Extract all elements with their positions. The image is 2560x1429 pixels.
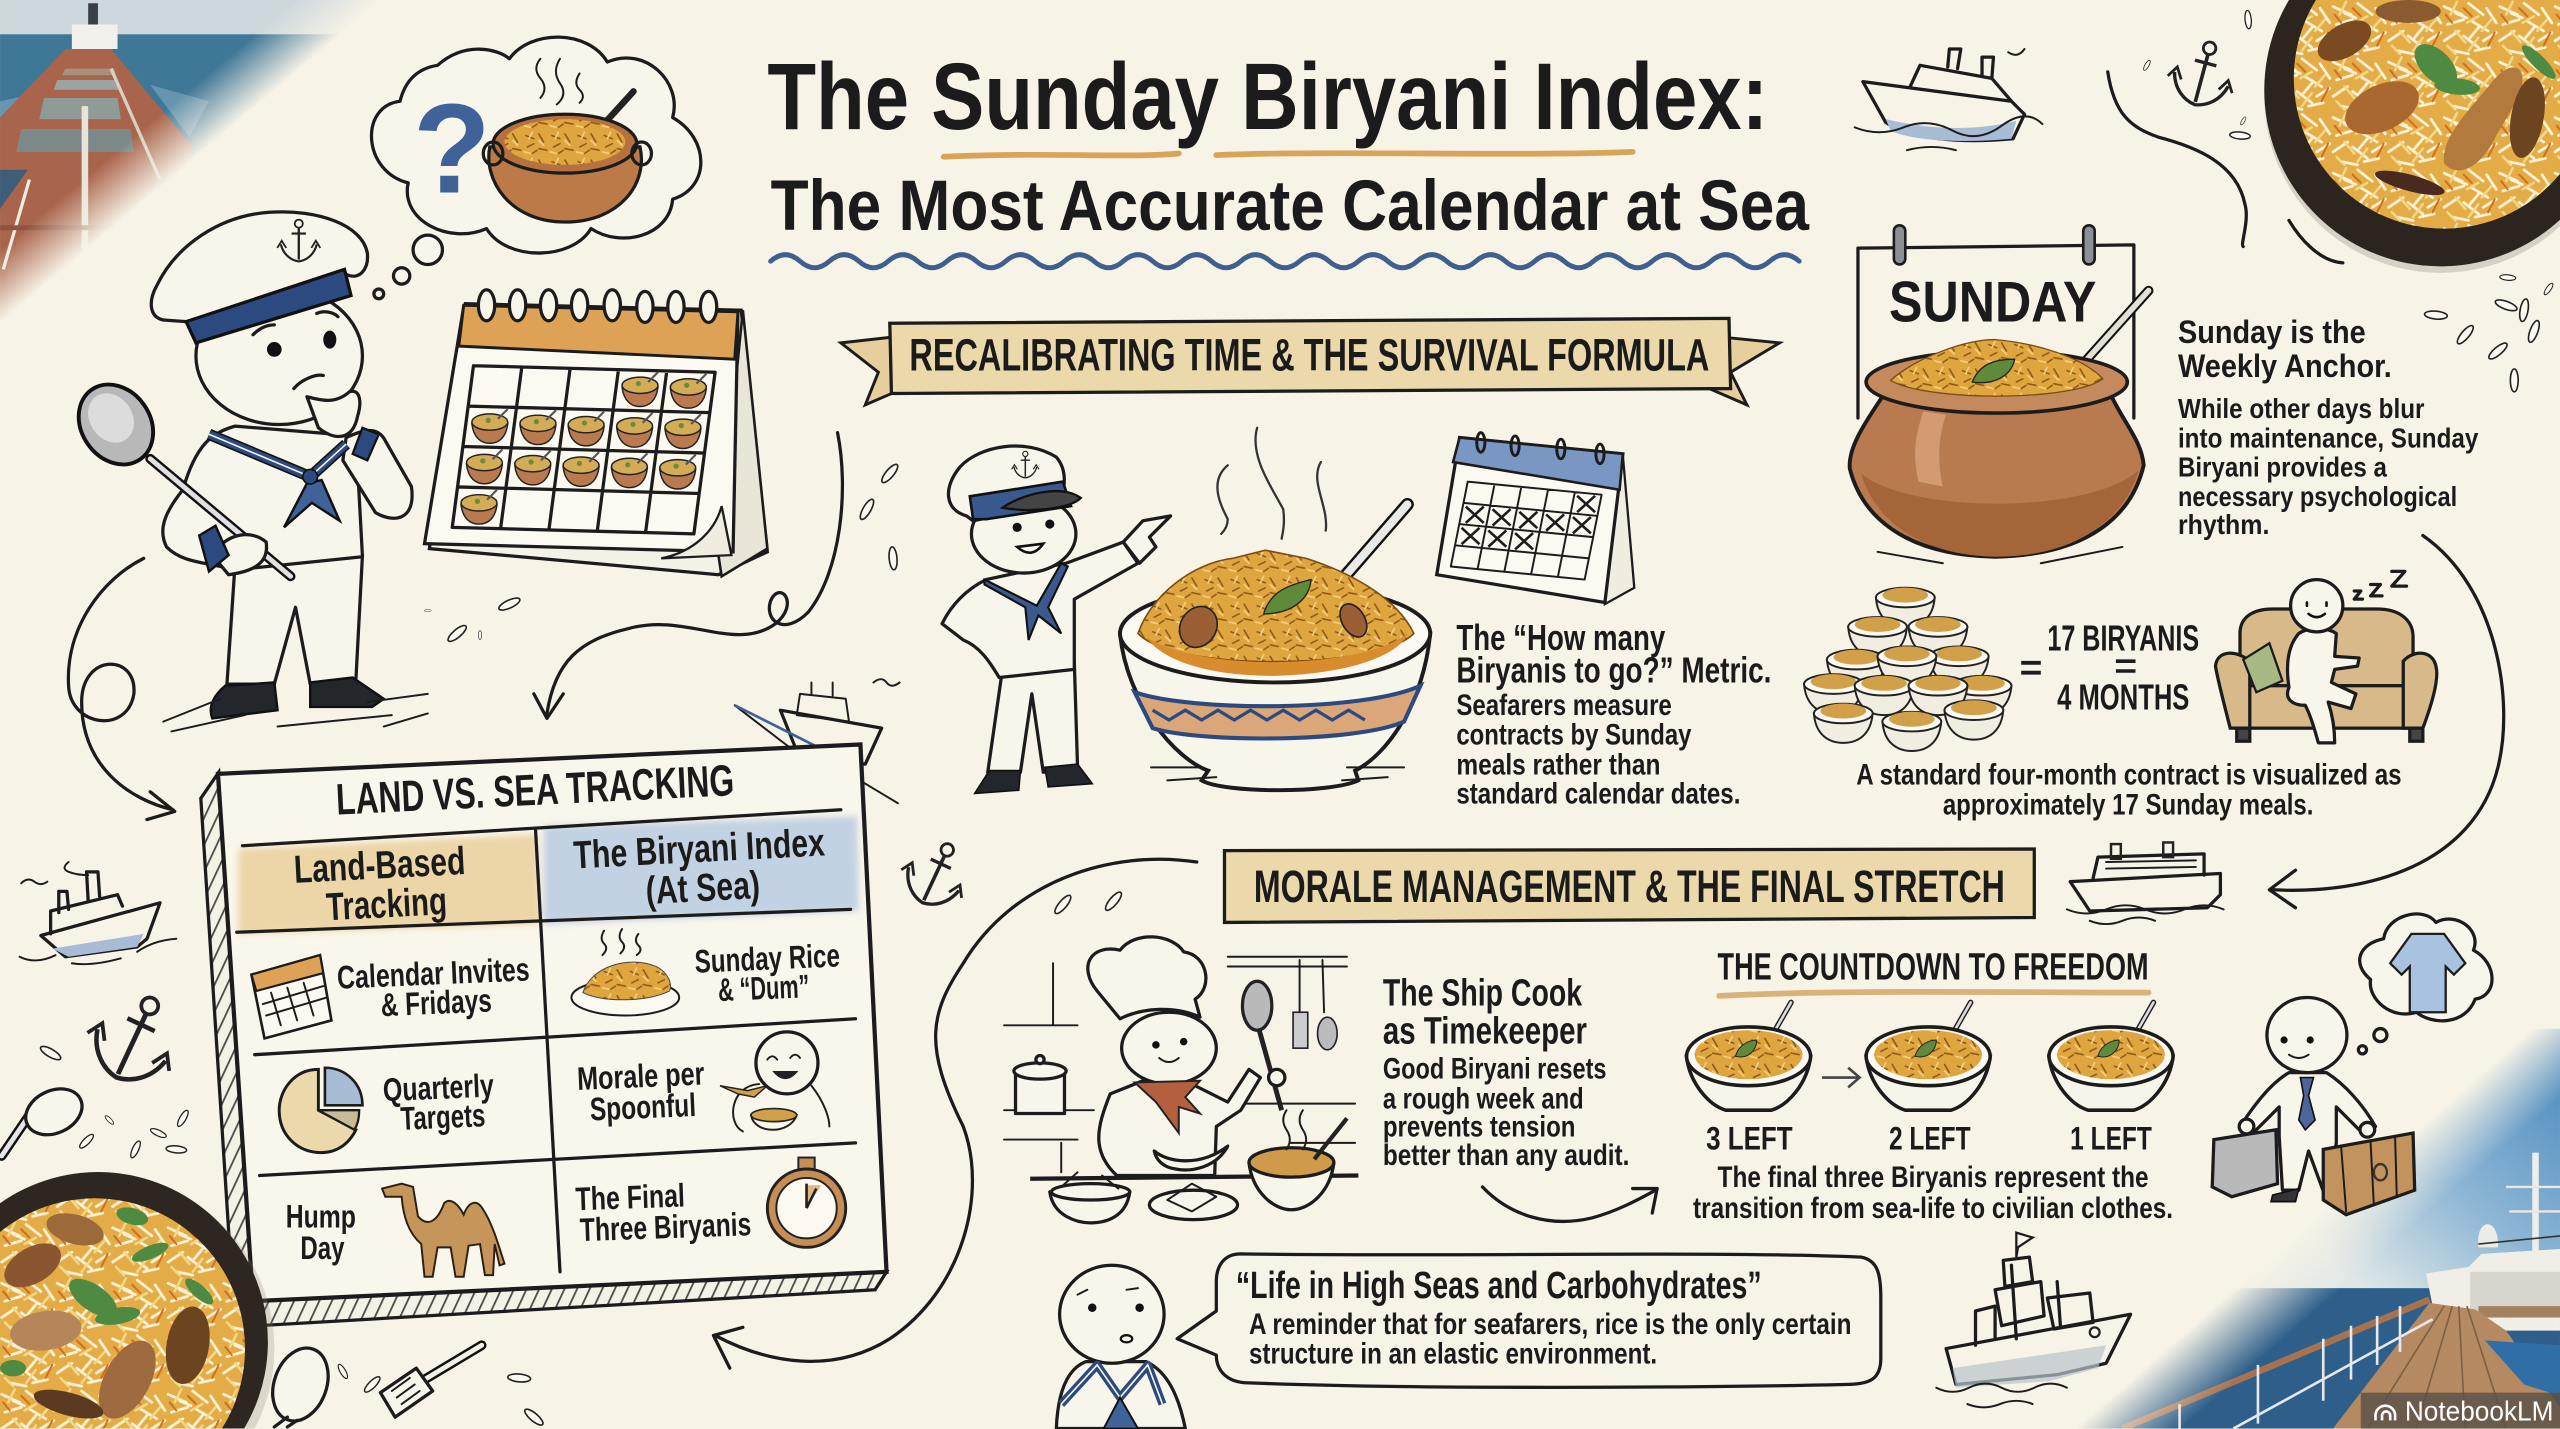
- head: [1060, 1265, 1164, 1363]
- countdown heading: [1718, 946, 2149, 996]
- face: [2280, 1036, 2314, 1058]
- text: ship cook: [1383, 972, 1629, 1172]
- row: sunday rice: [694, 936, 842, 1009]
- arrow: right side to banner: [2269, 536, 2504, 908]
- text: ship cook: better than any audit.: [1383, 1139, 1629, 1172]
- neckerchief: [1135, 1081, 1200, 1133]
- text: ship cook: The Ship Cook: [1383, 972, 1582, 1014]
- row: quarterly targets: Quarterly: [382, 1066, 495, 1108]
- anchor top right: [2162, 34, 2243, 113]
- text: contract caption: A standard four-month contract is visualized as: [1856, 758, 2402, 791]
- rings: [1894, 225, 2095, 264]
- brown suitcase: [2323, 1133, 2415, 1215]
- small dishes: [1050, 1172, 1238, 1223]
- row: morale per spoonful: Spoonful: [589, 1086, 697, 1128]
- scarf: [984, 563, 1068, 640]
- icon: biryani pot in cloud: [483, 59, 651, 222]
- raised spoon: [1242, 981, 1285, 1110]
- deck: [2333, 1303, 2560, 1429]
- text: how many biryanis metric: contracts by Sunday: [1456, 718, 1692, 751]
- title: [767, 44, 1810, 268]
- rim: [1120, 584, 1430, 682]
- text: final three biryanis: transition from sea-life to civilian clothes.: [1693, 1192, 2173, 1225]
- row: morale per spoonful: Morale per: [576, 1055, 705, 1097]
- title: The Most Accurate Calendar at Sea: [771, 166, 1810, 246]
- torso and arms: [163, 426, 362, 570]
- steam: [1217, 428, 1326, 539]
- anchor left: [76, 979, 194, 1096]
- arrow: sailor to table: [68, 558, 175, 820]
- header fill: sea: [544, 816, 859, 924]
- pot body: [1850, 392, 2144, 557]
- column heading: sea: [572, 821, 828, 917]
- banner: recalibrating time: RECALIBRATING TIME & THE SURVIVAL FORMULA: [909, 330, 1709, 381]
- face: [253, 312, 338, 389]
- row: hump day: Hump: [286, 1198, 356, 1235]
- row: hump day: [286, 1198, 356, 1266]
- spoon: [1342, 504, 1407, 580]
- row: sunday rice: Sunday Rice: [694, 936, 841, 980]
- text: final three biryanis: The final three Biryanis represent the: [1718, 1161, 2149, 1194]
- countdown labels: 3 LEFT: [1706, 1119, 1793, 1156]
- column heading: land: [293, 840, 468, 931]
- figure: [2287, 629, 2359, 743]
- row: calendar invites: & Fridays: [380, 981, 492, 1023]
- text: ship cook: a rough week and: [1383, 1083, 1584, 1116]
- text: contract caption: [1856, 758, 2402, 822]
- hanging utensils: [1293, 960, 1337, 1050]
- sailor pointing: [942, 446, 1171, 793]
- rice grains near banner: [1053, 890, 1124, 916]
- hat: [948, 446, 1081, 521]
- ship superstructure: [2426, 1249, 2560, 1331]
- steaming biryani bowl: [1120, 428, 1430, 790]
- icon: camel: [382, 1184, 504, 1277]
- thought cloud with shirt: [2358, 914, 2492, 1054]
- text: how many biryanis metric: Biryanis to go?” Metric.: [1456, 649, 1771, 690]
- text: sunday weekly anchor: into maintenance, Sunday: [2178, 422, 2479, 453]
- shoe: [2271, 1189, 2299, 1202]
- sailing ship sketch: [1936, 1233, 2131, 1407]
- face: [1013, 520, 1054, 553]
- spiral rings: [478, 290, 717, 322]
- photo: biryani plate top right: [2264, 0, 2560, 273]
- small ship sketch above table: [735, 679, 900, 803]
- rice: [1891, 340, 2103, 396]
- head: [1122, 1012, 1216, 1084]
- countdown bowls: [1687, 1002, 2173, 1110]
- pot rim: [1866, 351, 2127, 413]
- leaf: [1972, 359, 2015, 383]
- small ship left: [20, 862, 176, 964]
- text: sunday weekly anchor: necessary psychological: [2178, 481, 2457, 512]
- face: [1078, 1288, 1144, 1342]
- grey briefcase: [2212, 1130, 2278, 1197]
- head: [2267, 998, 2347, 1073]
- sailor at bottom with speech: [1056, 1265, 1185, 1429]
- formula: 17 biryanis equals 4 months: 17 BIRYANIS: [2047, 618, 2199, 659]
- text: how many biryanis metric: meals rather than: [1456, 749, 1660, 782]
- pool: [2485, 1340, 2560, 1396]
- chef body: [1099, 1069, 1260, 1176]
- text: ship cook: Good Biryani resets: [1383, 1052, 1607, 1085]
- rice grains below table: [336, 1363, 545, 1427]
- quote body: structure in an elastic environment.: [1249, 1337, 1657, 1370]
- text: sunday weekly anchor: rhythm.: [2178, 509, 2269, 540]
- formula: 17 biryanis equals 4 months: [2047, 618, 2199, 717]
- body: [2240, 1073, 2376, 1200]
- column heading: sea: The Biryani Index: [572, 821, 826, 878]
- quote speech bubble: [1177, 1254, 1881, 1387]
- hand at chin: [307, 391, 360, 436]
- tie: [2299, 1078, 2315, 1130]
- countdown heading: THE COUNTDOWN TO FREEDOM: [1718, 946, 2149, 988]
- collar and scarf: [209, 434, 346, 527]
- icon: calendar: [251, 955, 331, 1038]
- zzz: [2354, 571, 2407, 599]
- quote heading: “Life in High Seas and Carbohydrates”: [1236, 1264, 1762, 1306]
- counter: [1030, 1176, 1358, 1179]
- rice grains top right: [2142, 10, 2554, 392]
- banner: morale management: [1224, 849, 2034, 922]
- pointing hand: [1123, 516, 1171, 563]
- photo: biryani plate bottom left: [0, 1172, 274, 1429]
- bowl body: [1120, 633, 1430, 790]
- row: quarterly targets: [382, 1066, 496, 1138]
- table title: LAND VS. SEA TRACKING: [335, 756, 735, 825]
- row: morale per spoonful: [576, 1055, 707, 1128]
- fist and cuff: [199, 526, 267, 575]
- arrow: calendar to table: [534, 433, 842, 718]
- calendar header: [459, 305, 738, 359]
- spoon and spatula below table: [263, 1340, 482, 1429]
- decorative curve top right: [2108, 72, 2343, 263]
- column heading: land: Tracking: [325, 880, 448, 929]
- rice mound: [1138, 550, 1414, 662]
- cruise ship top right: [1855, 49, 2042, 150]
- thought cloud with question mark and pot: [371, 37, 701, 299]
- kitchen lines: [1004, 957, 1355, 1172]
- countdown labels: [1706, 1119, 2152, 1156]
- anchor mid: [892, 830, 980, 917]
- icon: rice plate: [571, 929, 679, 1016]
- text: ship cook: prevents tension: [1383, 1110, 1576, 1143]
- arrow: cook to countdown: [1482, 1187, 1657, 1221]
- stock pot: [1014, 1056, 1066, 1113]
- text: sunday weekly anchor: [2178, 313, 2479, 540]
- sunday card with pot: [1850, 225, 2149, 563]
- rice grains scatter: [424, 462, 900, 644]
- row: hump day: Day: [300, 1229, 344, 1266]
- trousers: [988, 661, 1078, 772]
- calendar grid: [452, 366, 715, 534]
- text: sunday weekly anchor: Biryani provides a: [2178, 452, 2387, 483]
- calendar with biryani bowls: [424, 290, 767, 576]
- spoon: [2078, 291, 2149, 369]
- small arrow between bowls: [1822, 1068, 1860, 1087]
- shoes: [211, 678, 384, 718]
- ladle: [63, 370, 291, 576]
- ship cook: [1004, 937, 1358, 1223]
- rail: [2122, 1300, 2429, 1429]
- cooking bowl: [1249, 1110, 1347, 1210]
- photo: cargo ship deck, top left: [0, 0, 392, 327]
- leaf: [1264, 580, 1311, 614]
- countdown labels: 2 LEFT: [1889, 1119, 1971, 1156]
- text: contract caption: approximately 17 Sunday meals.: [1943, 789, 2313, 822]
- text: how many biryanis metric: [1456, 617, 1771, 810]
- notebooklm watermark: NotebookLM: [2405, 1395, 2553, 1426]
- row: final three biryanis: [575, 1174, 752, 1248]
- head: [196, 287, 362, 424]
- collar and scarf: [1061, 1365, 1162, 1429]
- row: final three biryanis: Three Biryanis: [579, 1205, 752, 1248]
- formula: 17 biryanis equals 4 months: 4 MONTHS: [2057, 676, 2189, 717]
- icon: stopwatch: [767, 1158, 846, 1247]
- ship mast and dome: [2478, 1153, 2560, 1260]
- rice grains left: [39, 1044, 190, 1159]
- shoes: [975, 764, 1092, 793]
- banner: morale management: MORALE MANAGEMENT & THE FINAL STRETCH: [1254, 861, 2005, 912]
- text: how many biryanis metric: Seafarers measure: [1456, 689, 1672, 722]
- quote body: [1249, 1308, 1851, 1370]
- man with suitcases: [2212, 914, 2492, 1215]
- cuff: [353, 428, 379, 460]
- row: sunday rice: & “Dum”: [717, 967, 810, 1008]
- banner: recalibrating time: [841, 318, 1780, 405]
- sofa with resting figure: [2216, 571, 2437, 743]
- mini biryani bowls: [461, 372, 706, 524]
- countdown labels: 1 LEFT: [2070, 1119, 2152, 1156]
- text: sunday weekly anchor: While other days blur: [2178, 393, 2425, 424]
- icon: smiling eater: [720, 1032, 829, 1131]
- arrow: morale to table: [713, 859, 1197, 1368]
- text: sunday weekly anchor: Sunday is the: [2178, 313, 2366, 350]
- sofa: [2216, 609, 2437, 741]
- header fill: land: [238, 834, 540, 934]
- thought bubbles: [374, 235, 442, 299]
- column heading: land: Land-Based: [293, 840, 466, 892]
- bowl pattern band: [1135, 686, 1420, 738]
- row: final three biryanis: The Final: [575, 1176, 685, 1217]
- pile of 17 bowls: [1804, 588, 2011, 751]
- photo: cruise ship deck, bottom right: [2073, 1029, 2560, 1429]
- icon: question mark: ?: [413, 78, 491, 220]
- column heading: sea: (At Sea): [645, 864, 761, 913]
- trousers: [227, 555, 362, 684]
- nuts: [1172, 599, 1372, 654]
- icon: pie chart: [279, 1068, 362, 1153]
- panel: land vs sea tracking: [201, 744, 887, 1326]
- text: sunday weekly anchor: Weekly Anchor.: [2178, 347, 2392, 384]
- hands: [2239, 1119, 2375, 1137]
- text: ship cook: as Timekeeper: [1383, 1009, 1587, 1051]
- text: how many biryanis metric: standard calendar dates.: [1456, 777, 1740, 810]
- torso and pointing arm: [942, 542, 1138, 678]
- row: quarterly targets: Targets: [400, 1096, 486, 1137]
- blue calendar with crosses: [1437, 433, 1634, 604]
- hat: [151, 212, 368, 343]
- notebooklm watermark: [2361, 1393, 2560, 1429]
- row: calendar invites: Calendar Invites: [336, 950, 530, 996]
- small ship right of banner: [2067, 842, 2224, 924]
- row: calendar invites: [336, 950, 532, 1025]
- card: [1858, 245, 2134, 418]
- sailor thinking with ladle: [63, 212, 428, 731]
- small serving spoon: [1154, 1146, 1228, 1170]
- spoon left: [2, 1080, 89, 1156]
- face: [1152, 1038, 1187, 1062]
- cushion: [2243, 643, 2282, 692]
- text: how many biryanis metric: The “How many: [1456, 617, 1665, 658]
- text: final three biryanis: [1693, 1161, 2173, 1225]
- head: [971, 495, 1076, 573]
- quote body: A reminder that for seafarers, rice is the only certain: [1249, 1308, 1851, 1341]
- chef hat: [1088, 937, 1206, 1019]
- title: The Sunday Biryani Index:: [767, 44, 1768, 150]
- heading: sunday: SUNDAY: [1889, 271, 2096, 335]
- equals sign: [2021, 663, 2041, 673]
- table grid lines: [237, 810, 856, 1272]
